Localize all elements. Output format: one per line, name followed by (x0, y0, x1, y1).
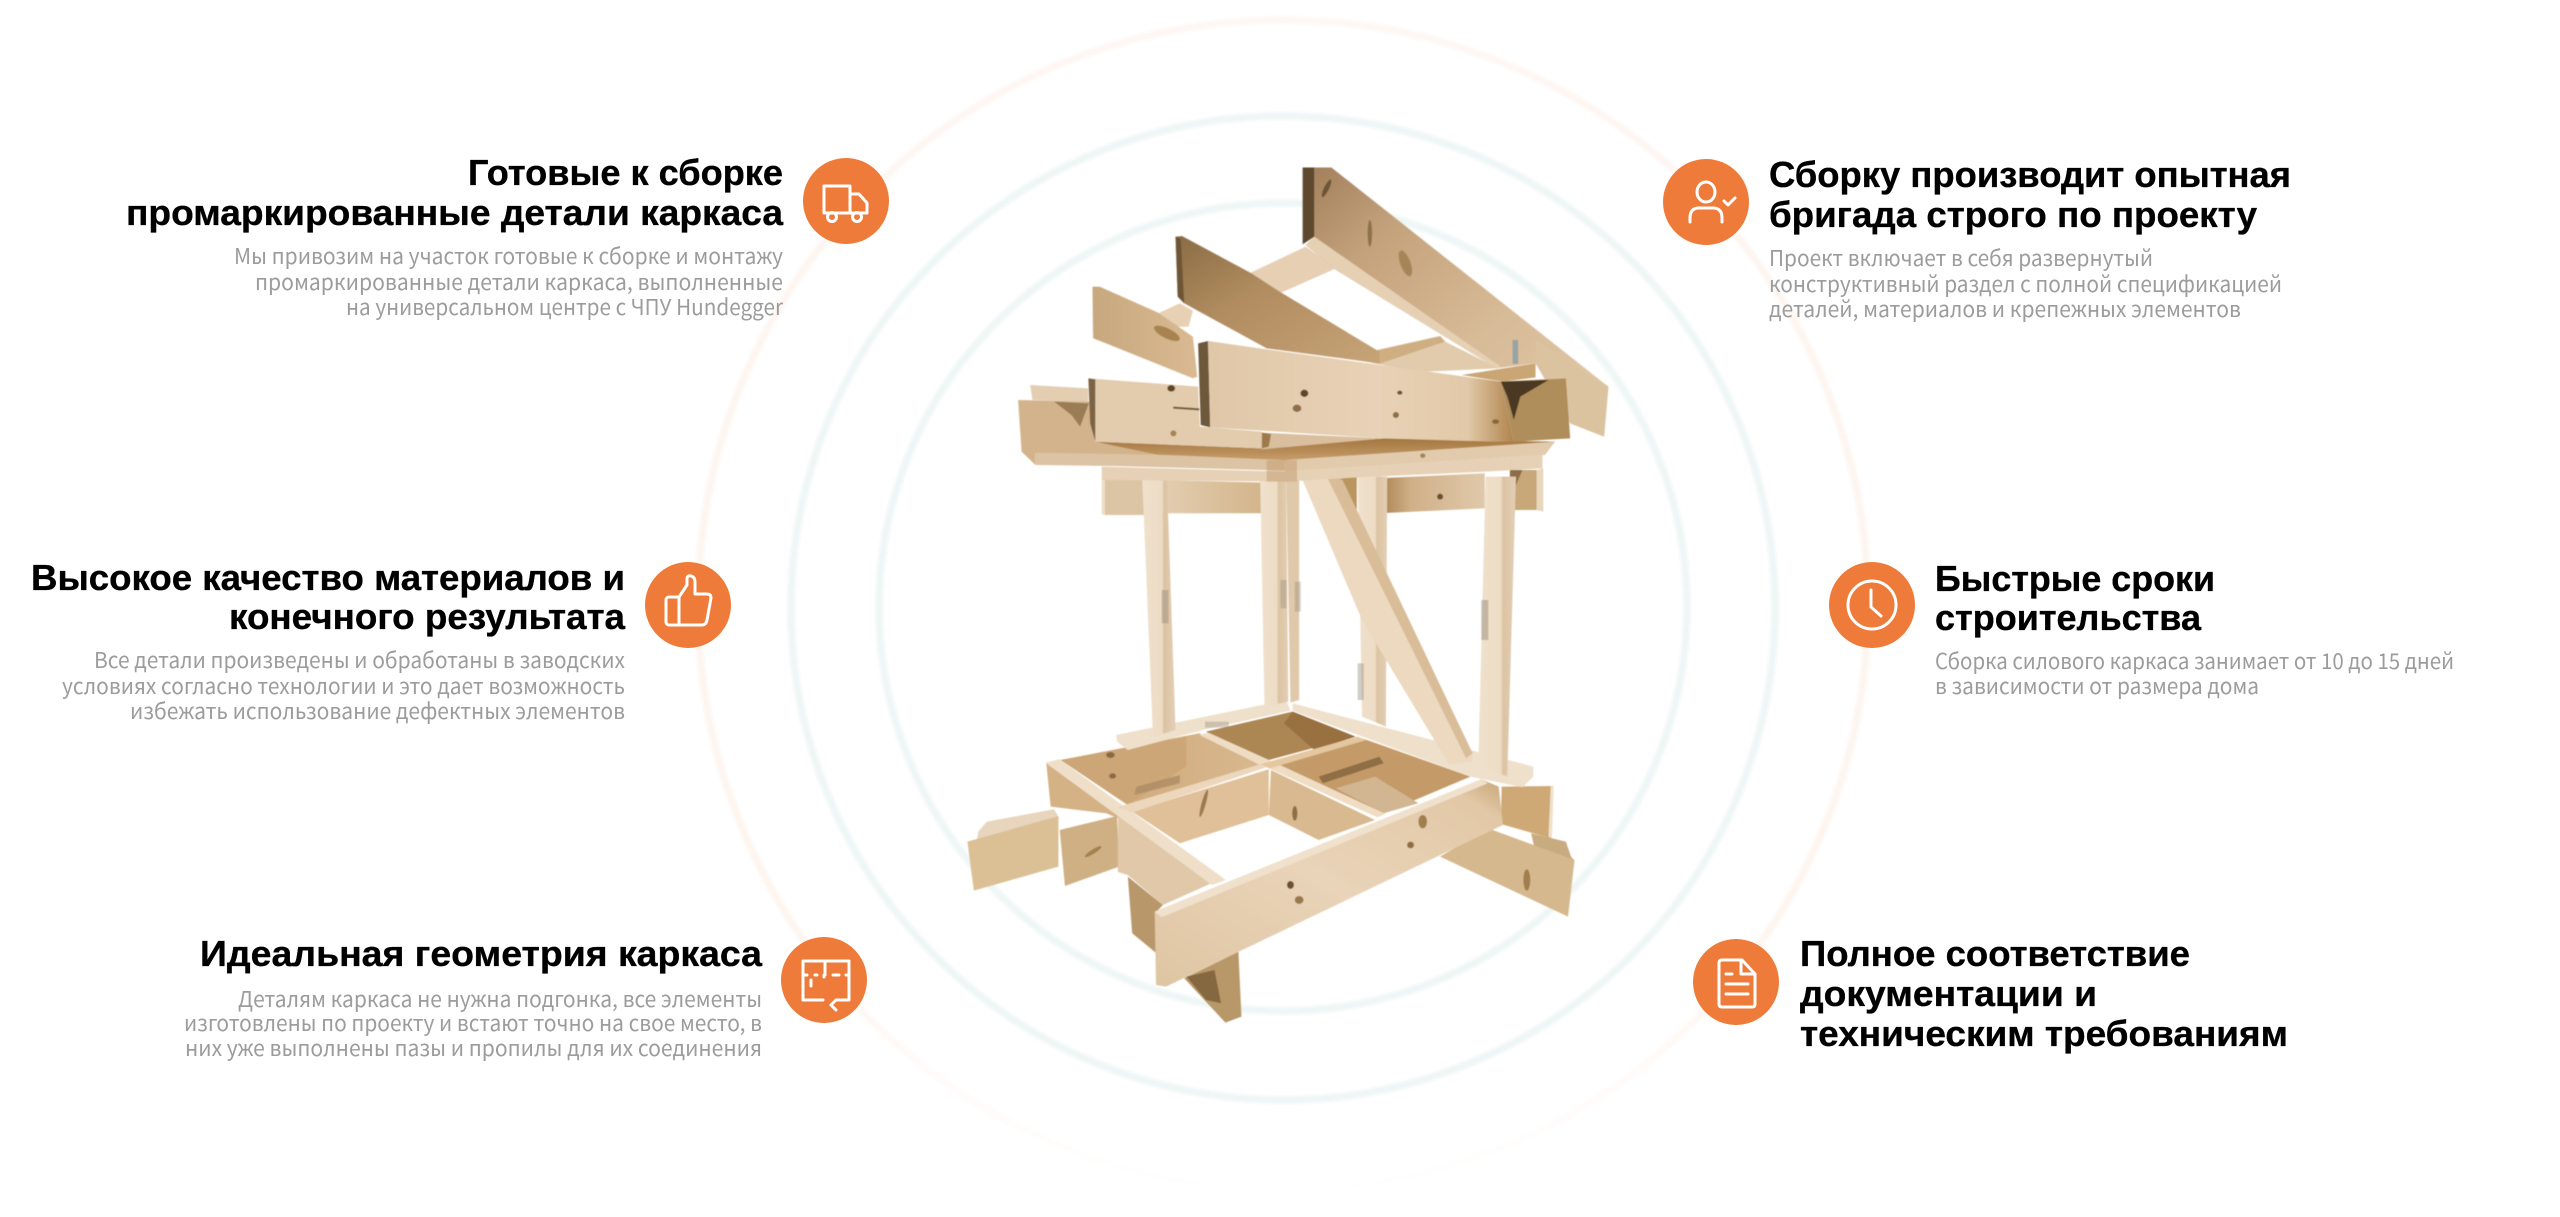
rafters, beams and top plates (1018, 168, 1608, 482)
description: Проект включает в себя развернутый (1769, 241, 2153, 273)
item: experienced crew (1663, 154, 2291, 324)
description: деталей, материалов и крепежных элементов (1769, 292, 2241, 324)
icon: document (1693, 939, 1779, 1025)
posts and diagonal brace (1142, 473, 1516, 777)
description: Мы привозим на участок готовые к сборке и монтажу (234, 239, 784, 271)
heading: техническим требованиям (1800, 1013, 2288, 1054)
heading (126, 152, 784, 233)
heading (31, 557, 626, 637)
description: конструктивный раздел с полной спецификацией (1769, 267, 2282, 299)
description: изготовлены по проекту и встают точно на свое место, в (184, 1006, 762, 1038)
heading: бригада строго по проекту (1769, 194, 2257, 235)
heading: Высокое качество материалов и (31, 557, 625, 598)
timber frame illustration (967, 168, 1608, 1023)
description (1935, 644, 2454, 701)
background rings (698, 20, 1868, 1190)
description (234, 239, 784, 322)
floor frame and lower planks (967, 700, 1575, 1023)
icon: thumbs up (645, 562, 731, 648)
heading: Быстрые сроки (1935, 558, 2215, 599)
item: fast construction (1829, 558, 2454, 701)
heading: промаркированные детали каркаса (126, 192, 784, 233)
item: quality (31, 557, 731, 726)
wall headers (1102, 467, 1543, 515)
description: в зависимости от размера дома (1935, 669, 2259, 701)
item: documentation (1693, 933, 2288, 1054)
heading: Идеальная геометрия каркаса (200, 933, 763, 974)
description: них уже выполнены пазы и пропилы для их соединения (185, 1031, 762, 1063)
heading: документации и (1800, 973, 2097, 1014)
icon: truck (803, 158, 889, 244)
description: Деталям каркаса не нужна подгонка, все элементы (238, 982, 762, 1014)
description: Сборка силового каркаса занимает от 10 до 15 дней (1935, 644, 2454, 676)
icon: person with check (1663, 159, 1749, 245)
description (184, 982, 762, 1063)
item: geometry (184, 933, 867, 1063)
heading: строительства (1935, 597, 2202, 638)
description (62, 643, 625, 726)
description (1769, 241, 2282, 324)
heading: Полное соответствие (1800, 933, 2190, 974)
icon: clock (1829, 562, 1915, 648)
description: Все детали произведены и обработаны в заводских (94, 643, 625, 675)
description: на универсальном центре с ЧПУ Hundegger (346, 290, 783, 322)
heading (1769, 154, 2291, 235)
description: условиях согласно технологии и это дает возможность (62, 669, 625, 701)
description: промаркированные детали каркаса, выполненные (255, 265, 783, 297)
heading (1935, 558, 2215, 638)
heading (1800, 933, 2288, 1054)
description: избежать использование дефектных элементов (130, 694, 625, 726)
heading: Сборку производит опытная (1769, 154, 2291, 195)
item: ready-to-assemble parts (126, 152, 889, 322)
heading: Готовые к сборке (468, 152, 783, 193)
icon: floor plan (781, 937, 867, 1023)
heading: конечного результата (229, 596, 626, 637)
